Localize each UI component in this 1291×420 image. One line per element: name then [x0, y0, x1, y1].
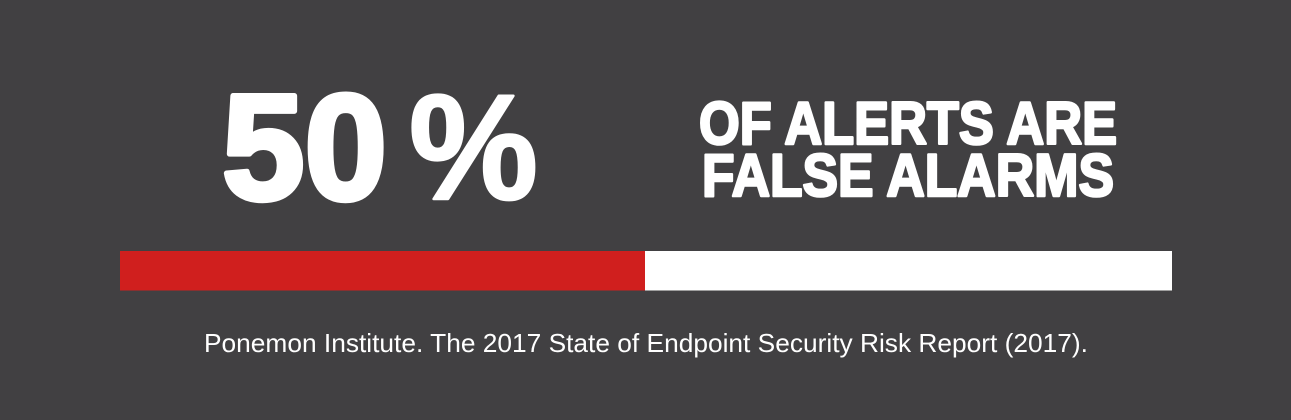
- big statistic: 50 percent: [222, 63, 538, 231]
- number 50: 50: [222, 63, 387, 231]
- bar remainder: [645, 251, 1172, 290]
- progress bar at 50 percent: [120, 251, 1172, 290]
- bar filled portion: [120, 251, 645, 290]
- percent sign: %: [409, 63, 538, 231]
- source citation: Ponemon Institute. The 2017 State of Endpoint Security Risk Report (2017).: [204, 328, 1088, 358]
- headline: [699, 90, 1117, 209]
- headline line 1: OF ALERTS ARE: [699, 90, 1117, 157]
- headline line 2: FALSE ALARMS: [702, 142, 1114, 209]
